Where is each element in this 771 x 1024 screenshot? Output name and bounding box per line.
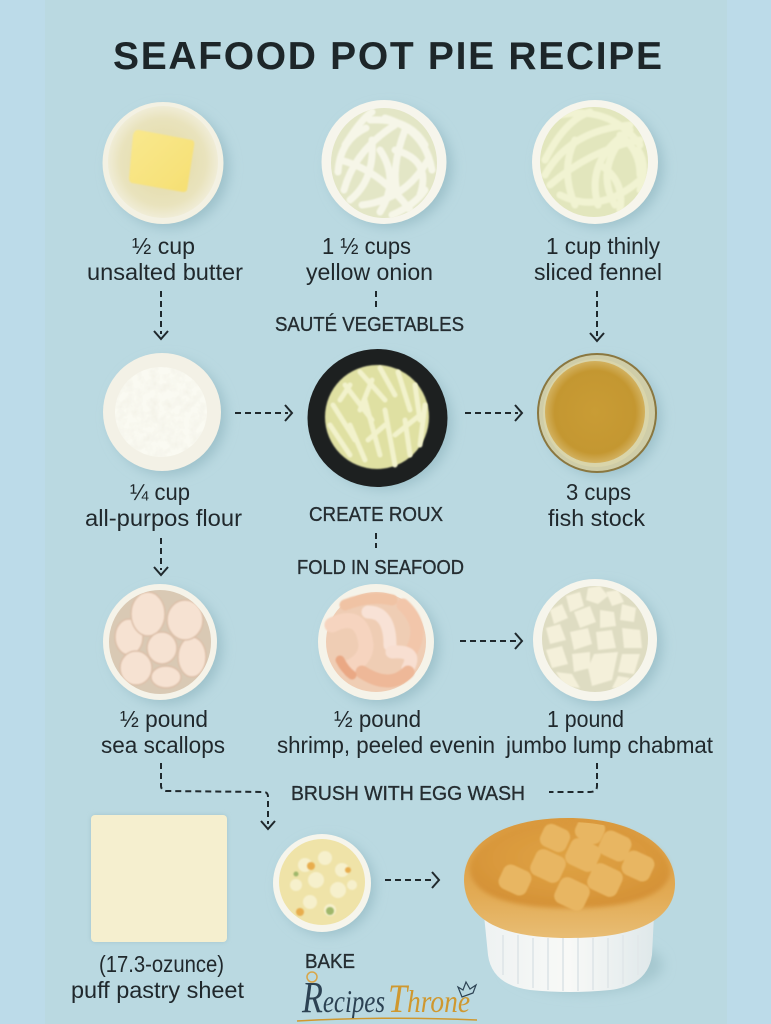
arrow: filling to pie [385, 872, 439, 888]
ingredient: pot pie filling [273, 834, 375, 935]
arrow: fennel to stock [590, 291, 604, 341]
label: fennel: 1 cup thinly [546, 233, 660, 259]
label: yellow onion [306, 233, 433, 285]
label: sea scallops [101, 706, 225, 758]
label: puff pastry: (17.3-ozunce) [99, 951, 224, 977]
label: fish stock: 3 cups [566, 479, 631, 505]
ingredient: fennel [532, 100, 663, 227]
step: brush with egg wash: BRUSH WITH EGG WASH [291, 782, 525, 805]
label: fish stock [548, 479, 645, 531]
logo: Recipes Throne: Throne [388, 976, 470, 1021]
step: fold in seafood: FOLD IN SEAFOOD [297, 556, 464, 579]
arrow: shrimp to crab [460, 633, 522, 649]
step: bake: BAKE [305, 950, 355, 973]
label: fish stock: fish stock [548, 505, 645, 531]
ingredient: sea scallops [103, 584, 222, 704]
arrow: scallops to filling [161, 763, 275, 829]
ramekin [484, 915, 654, 992]
step: create roux: CREATE ROUX [309, 503, 443, 526]
label: yellow onion: 1 ½ cups [322, 233, 411, 259]
label: shrimp: ½ pound [334, 706, 421, 732]
arrow: flour to scallops [154, 538, 168, 575]
label: crab [505, 706, 714, 758]
connector: roux to seafood [375, 533, 377, 548]
label: sea scallops: ½ pound [120, 706, 208, 732]
step: saute vegetables: SAUTÉ VEGETABLES [275, 313, 464, 336]
arrow: flour to roux [235, 405, 292, 421]
label: butter: unsalted butter [87, 259, 243, 285]
ingredient: shrimp [318, 584, 439, 704]
label: flour [85, 479, 242, 531]
title: SEAFOOD POT PIE RECIPE [113, 35, 662, 78]
label: puff pastry: puff pastry sheet [71, 977, 245, 1003]
ingredient: flour [103, 353, 226, 475]
arrow: roux to stock [465, 405, 522, 421]
ingredient: fish stock [538, 354, 661, 476]
ingredient: puff pastry sheet [91, 815, 227, 942]
label: shrimp: shrimp, peeled evenin [277, 732, 495, 758]
label: yellow onion: yellow onion [306, 259, 433, 285]
logo: Recipes Throne: Recipes [301, 973, 385, 1022]
ingredient: crab meat [533, 579, 662, 705]
connector: onion to saute [375, 291, 377, 308]
finished seafood pot pie [464, 813, 675, 993]
crust [464, 813, 675, 938]
label: crab: 1 pound [547, 706, 624, 732]
label: flour: ¼ cup [130, 479, 190, 505]
label: flour: all-purpos flour [85, 505, 242, 531]
label: crab: jumbo lump chabmat [505, 732, 714, 758]
ingredient: yellow onion [322, 100, 452, 227]
label: shrimp [277, 706, 495, 758]
logo: Recipes Throne [297, 972, 477, 1022]
connector: crab to egg wash [549, 763, 597, 792]
arrow: butter to flour [154, 291, 168, 339]
label: fennel: sliced fennel [534, 259, 662, 285]
ingredient: butter [102, 102, 229, 228]
label: butter: ½ cup [132, 233, 195, 259]
label: fennel [534, 233, 662, 285]
label: sea scallops: sea scallops [101, 732, 225, 758]
ingredient: sauteed onions in black bowl [308, 349, 452, 489]
label: puff pastry [71, 951, 245, 1003]
label: butter [87, 233, 243, 285]
